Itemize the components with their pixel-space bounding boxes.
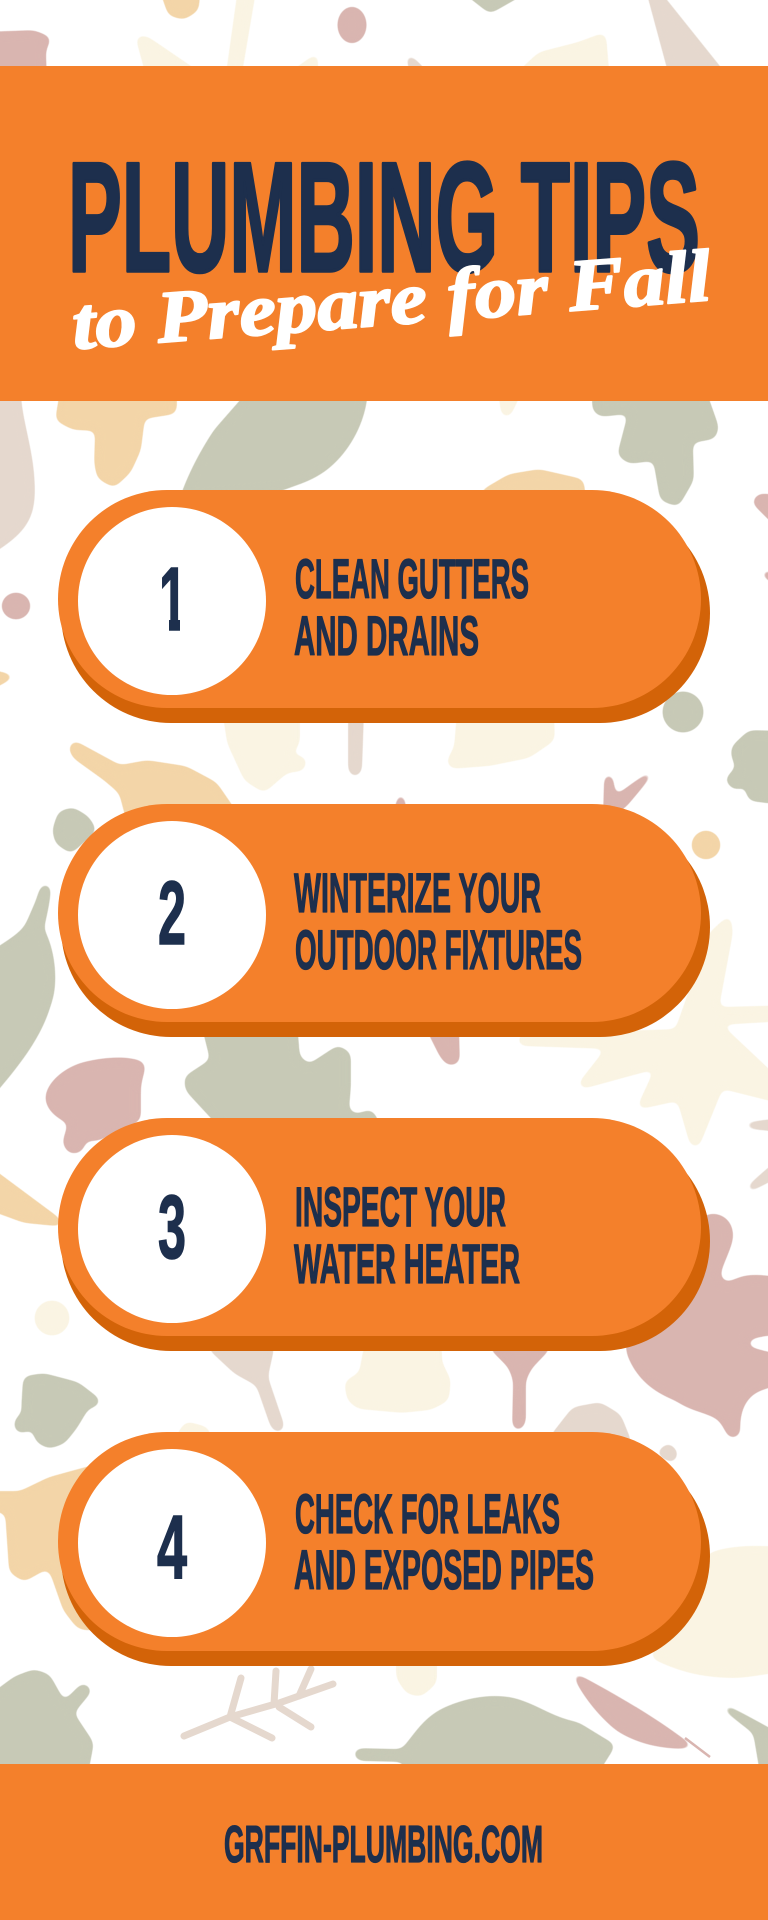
tip 3 number circle <box>78 1135 266 1323</box>
tip 4 pill <box>58 1432 710 1666</box>
tip 3 pill <box>58 1118 710 1351</box>
subtitle: to Prepare for Fall: to Prepare for Fall <box>69 235 714 366</box>
tip 1 text <box>294 547 529 667</box>
tip 3 text: WATER HEATER <box>294 1232 520 1295</box>
tip 2 text: WINTERIZE YOUR <box>294 861 541 924</box>
tip 3 text: INSPECT YOUR <box>295 1175 506 1238</box>
tip 2 number: 2 <box>158 864 186 964</box>
tip 3 text <box>294 1175 520 1295</box>
tip 1 pill: CLEAN GUTTERS <box>295 547 529 610</box>
tip 4 text <box>294 1482 594 1601</box>
tip 2 number circle <box>78 821 266 1009</box>
tip 2 text <box>294 861 582 981</box>
tip 1 number <box>150 550 192 650</box>
header banner <box>0 66 768 401</box>
tip 2 pill <box>58 804 710 1037</box>
footer banner <box>0 1764 768 1920</box>
tip 3 number: 3 <box>158 1178 186 1278</box>
tip 1 text: AND DRAINS <box>294 604 479 667</box>
tip 1 number circle <box>78 507 266 695</box>
tip 4 number: 4 <box>157 1497 187 1597</box>
tip 4 number circle <box>78 1449 266 1637</box>
tip 1 number: 1 <box>159 550 187 650</box>
tip 1 pill <box>58 490 710 723</box>
